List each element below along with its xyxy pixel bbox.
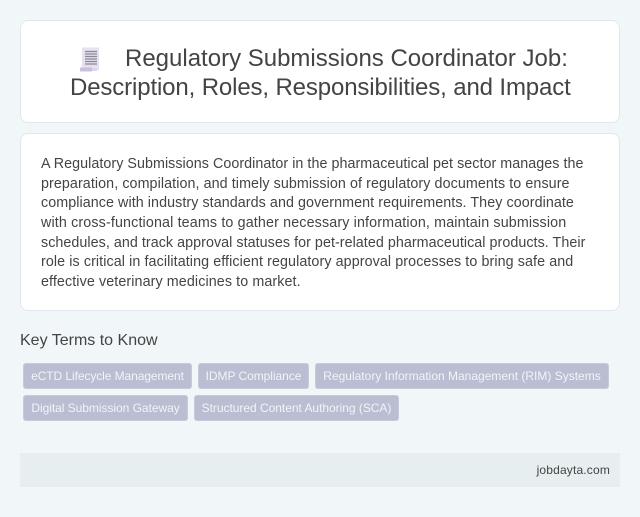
chip: gateway (23, 395, 188, 421)
chip group: key terms (23, 363, 609, 421)
chip: IDMP (198, 363, 309, 389)
chip: eCTD (23, 363, 192, 389)
chip: RIM: Regulatory Information Management (RIM) Systems (323, 369, 601, 383)
chip: SCA: Structured Content Authoring (SCA) (202, 401, 391, 415)
description text: schedules, and track approval statuses for pet-related pharmaceutical products. Their (41, 235, 585, 251)
chip: gateway: Digital Submission Gateway (31, 401, 180, 415)
description text: A Regulatory Submissions Coordinator in the pharmaceutical pet sector manages the (41, 156, 583, 172)
panel: title card (20, 20, 620, 123)
description text (41, 156, 586, 290)
footer source: jobdayta.com (537, 463, 610, 477)
description text: effective veterinary medicines to market. (41, 274, 301, 290)
icon: document scroll (80, 48, 99, 72)
description text: with cross-functional teams to gather necessary information, maintain submission (41, 215, 566, 231)
description text: role is critical in facilitating efficient regulatory approval processes to bring safe and (41, 254, 573, 270)
heading: key terms: Key Terms to Know (20, 332, 158, 349)
chip: eCTD: eCTD Lifecycle Management (31, 369, 184, 383)
heading line one: Regulatory Submissions Coordinator Job: (125, 45, 568, 72)
footer bar (20, 453, 620, 487)
chip: RIM (315, 363, 609, 389)
heading line two: Description, Roles, Responsibilities, and Impact (70, 74, 571, 101)
panel: description card (20, 133, 620, 311)
chip: SCA (194, 395, 399, 421)
description text: compliance with industry standards and government requirements. They coordinate (41, 195, 574, 211)
description text: preparation, compilation, and timely submission of regulatory documents to ensure (41, 176, 570, 192)
chip: IDMP: IDMP Compliance (206, 369, 301, 383)
